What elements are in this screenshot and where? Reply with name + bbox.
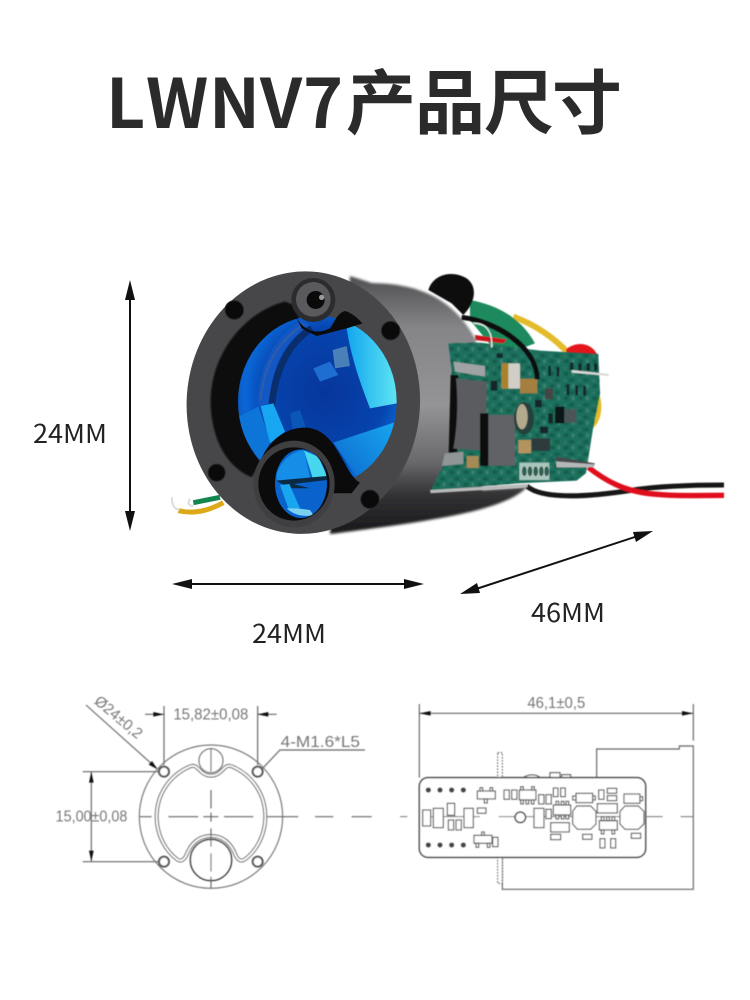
PCB component texture <box>431 343 600 491</box>
components <box>555 407 564 423</box>
crystal <box>502 363 520 389</box>
dimension text: 4-M1.6*L5 <box>281 734 360 751</box>
CAD drawing: front view <box>56 693 372 888</box>
header pins right <box>572 370 609 376</box>
label: width 24MM: 24MM <box>252 614 326 651</box>
circuit board <box>430 317 609 493</box>
label: height 24MM: 24MM <box>33 414 107 451</box>
dimension text <box>56 693 360 826</box>
top emitter boss <box>291 278 335 322</box>
black connector <box>428 274 474 315</box>
top boss notch <box>295 311 363 336</box>
top small circle <box>199 749 223 773</box>
title: LWNV7 <box>106 49 343 148</box>
small receiver lens <box>275 449 327 518</box>
dimension arrowheads <box>89 712 268 862</box>
dark aperture <box>211 302 303 477</box>
dimension arrowheads <box>419 711 693 716</box>
side connector pins <box>498 753 587 883</box>
main PCB <box>431 343 600 491</box>
wire: red loop <box>566 344 597 355</box>
center line <box>400 815 693 818</box>
rear parts behind housing <box>428 274 724 496</box>
lower boss black band <box>257 428 360 493</box>
dimension text: 15,82±0,08 <box>173 706 248 723</box>
bottom large circle <box>190 839 232 881</box>
lower board edge <box>430 484 528 493</box>
screw <box>514 402 534 434</box>
dimension line <box>419 704 693 778</box>
dimension text: Ø24±0,2 <box>91 693 146 743</box>
wires: red and black leads <box>527 467 724 496</box>
housing body <box>330 276 527 534</box>
main blue lens <box>238 316 397 488</box>
title: 产品尺寸 <box>346 48 622 149</box>
connector pads <box>519 463 549 480</box>
product photo: laser module <box>172 264 724 542</box>
center lines <box>140 748 372 888</box>
outer circle <box>139 745 283 888</box>
lower boss inner ring <box>258 447 330 521</box>
large chip left <box>453 378 487 451</box>
mounting screws <box>208 301 400 509</box>
housing outline <box>502 746 693 889</box>
PCB dots <box>426 787 466 848</box>
front face ring <box>178 264 429 542</box>
dimension text: 46,1±0,5 <box>527 695 585 712</box>
label: length 46MM: 46MM <box>531 593 605 630</box>
mounting holes <box>159 767 263 867</box>
PCB outline <box>419 778 646 857</box>
lens reflections <box>238 320 397 487</box>
central hole <box>515 812 526 823</box>
chip shadow <box>449 375 458 455</box>
arrow: diagonal length dimension <box>460 531 653 594</box>
wire: yellow loop <box>513 317 598 427</box>
aperture outline <box>157 766 265 861</box>
chip pins <box>453 362 485 377</box>
second chip <box>488 415 515 466</box>
lower boss rim <box>253 441 335 527</box>
PCB components <box>423 787 644 848</box>
arrow: horizontal width dimension <box>172 579 424 589</box>
rear green board <box>470 300 535 357</box>
wires: left green and yellow <box>172 497 223 512</box>
black wire over board <box>462 317 537 379</box>
CAD drawing: side view <box>400 695 693 889</box>
dimension lines <box>83 705 365 862</box>
lens front assembly <box>186 271 420 534</box>
red strip behind <box>475 335 507 343</box>
dimension text: 15,00±0,08 <box>56 809 127 826</box>
arrow: vertical height dimension <box>125 280 135 531</box>
